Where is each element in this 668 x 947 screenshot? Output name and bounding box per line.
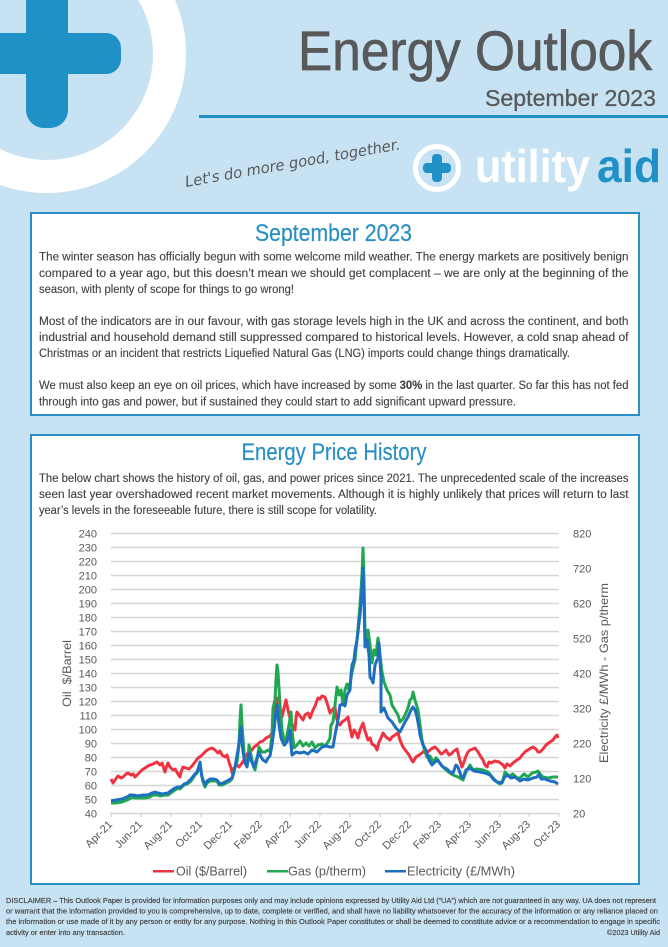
legend: Electricity (£/MWh): [407, 864, 515, 878]
paragraph 3: through into gas and power, but if sustained they could start to add significant upward pressure.: [39, 396, 516, 408]
logo wordmark: aid: aid: [597, 140, 661, 192]
legend: Oil ($/Barrel): [176, 864, 247, 878]
left axis labels: 50: [85, 794, 97, 806]
x axis labels: Jun-22: [292, 819, 324, 851]
left axis labels: 240: [79, 528, 97, 540]
left axis labels: 210: [79, 570, 97, 582]
left axis labels: 170: [79, 626, 97, 638]
x axis labels: Feb-23: [411, 819, 444, 852]
x axis labels: Feb-22: [232, 819, 265, 852]
x axis labels: Aug-22: [321, 819, 354, 852]
left axis labels: 90: [85, 738, 97, 750]
left axis labels: 140: [79, 668, 97, 680]
right axis labels: 720: [573, 564, 591, 576]
paragraph 2: Most of the indicators are in our favour, with gas storage levels high in the UK and across the continent, and both: [39, 316, 628, 328]
right axis labels: 320: [573, 704, 591, 716]
x axis labels: Aug-23: [500, 819, 533, 852]
left axis title: Oil $/Barrel: [60, 640, 74, 707]
icon: logo plus in ring: [416, 146, 458, 190]
logo wordmark: utility: utility: [475, 140, 590, 192]
x axis labels: Jun-23: [472, 819, 504, 851]
header rule: [199, 115, 668, 118]
tagline: Let's do more good, together.: [184, 135, 401, 191]
left axis labels: 80: [85, 752, 97, 764]
left axis labels: 200: [79, 584, 97, 596]
legend: Gas (p/therm): [288, 864, 366, 878]
left axis labels: 160: [79, 640, 97, 652]
left axis labels: [79, 528, 97, 820]
disclaimer: [6, 896, 660, 937]
x axis labels: Oct-22: [352, 819, 384, 850]
paragraph 1: compared to a year ago, but this doesn’t mean we should get complacent – we are only at the beginning of the: [39, 268, 628, 280]
paragraph 3: [39, 380, 628, 408]
right axis labels: 120: [573, 774, 591, 786]
paragraph 2: [39, 316, 629, 360]
right axis labels: 420: [573, 668, 591, 680]
panel heading: Energy Price History: [242, 439, 426, 466]
left axis labels: 60: [85, 780, 97, 792]
paragraph 2: Christmas or an incident that restricts Liquefied Natural Gas (LNG) imports could change things dramatically.: [39, 348, 570, 360]
x axis labels: Dec-21: [202, 819, 235, 852]
right axis labels: 820: [573, 528, 591, 540]
paragraph 3: We must also keep an eye on oil prices, which have increased by some 30% in the last quarter. So far this has not fed: [39, 380, 628, 392]
line chart: [60, 528, 611, 878]
panel heading: September 2023: [255, 220, 412, 247]
right axis labels: [573, 528, 591, 820]
paragraph 2: industrial and household demand still suppressed compared to historical levels. However, a cold snap ahead of: [39, 332, 629, 344]
logo: utility aid: [416, 140, 661, 192]
x axis labels: Oct-21: [173, 819, 205, 850]
x axis labels: Oct-23: [531, 819, 563, 850]
left axis labels: 150: [79, 654, 97, 666]
left axis labels: 180: [79, 612, 97, 624]
left axis labels: 130: [79, 682, 97, 694]
left axis labels: 100: [79, 724, 97, 736]
left axis labels: 40: [85, 808, 97, 820]
left axis labels: 120: [79, 696, 97, 708]
x axis labels: Jun-21: [113, 819, 145, 851]
series: electricity: [111, 568, 558, 801]
icon: large plus in ring: [0, 0, 170, 176]
right axis labels: 20: [573, 808, 585, 820]
left axis labels: 230: [79, 542, 97, 554]
paragraph 1: [39, 252, 628, 296]
disclaimer: DISCLAIMER – This Outlook Paper is provided for information purposes only and may include opinions expressed by Utility Aid Ltd (“UA”) which are not guaranteed in any way. UA does not represent: [6, 896, 656, 905]
x axis labels: Apr-22: [262, 819, 294, 850]
chart description: The below chart shows the history of oil, gas, and power prices since 2021. The unprecedented scale of the increases: [39, 473, 629, 485]
subtitle date: September 2023: [485, 85, 656, 111]
left axis labels: 220: [79, 556, 97, 568]
x axis labels: [83, 819, 563, 852]
legend: [153, 864, 515, 878]
x axis labels: Apr-21: [83, 819, 115, 850]
right axis labels: 520: [573, 634, 591, 646]
disclaimer: activity or enter into any transaction.: [6, 928, 125, 937]
x axis labels: Apr-23: [442, 819, 474, 850]
x axis labels: Dec-22: [381, 819, 414, 852]
paragraph 1: The winter season has officially begun with some welcome mild weather. The energy markets are positively benign: [39, 252, 628, 264]
disclaimer: ©2023 Utility Aid: [607, 928, 660, 937]
series: gas: [111, 548, 558, 803]
right axis labels: 220: [573, 738, 591, 750]
disclaimer: the information or use made of it by any person or entity for any purpose. Nothing in this Outlook Paper constitutes or shall be deemed to constitute advice or a recommendation to engage in specific: [6, 917, 660, 926]
chart description: [39, 473, 629, 517]
left axis labels: 190: [79, 598, 97, 610]
x axis labels: Aug-21: [142, 819, 175, 852]
right axis title: Electricity £/MWh - Gas p/therm: [597, 583, 611, 763]
chart description: year’s levels in the foreseeable future, there is still scope for volatility.: [39, 505, 377, 517]
paragraph 1: season, with plenty of scope for things to go wrong!: [39, 284, 294, 296]
left axis labels: 70: [85, 766, 97, 778]
right axis labels: 620: [573, 598, 591, 610]
chart description: seen last year overshadowed recent market movements. Although it is highly unlikely that prices will return to last: [39, 489, 629, 501]
series: oil: [111, 696, 558, 783]
panel: September 2023 commentary: [31, 213, 639, 415]
panel: Energy Price History: [31, 435, 639, 884]
left axis labels: 110: [79, 710, 97, 722]
disclaimer: or warrant that the information provided to you is comprehensive, up to date, complete or verified, and shall have no liability whatsoever for the accuracy of the information or any reliance placed on: [6, 906, 658, 916]
